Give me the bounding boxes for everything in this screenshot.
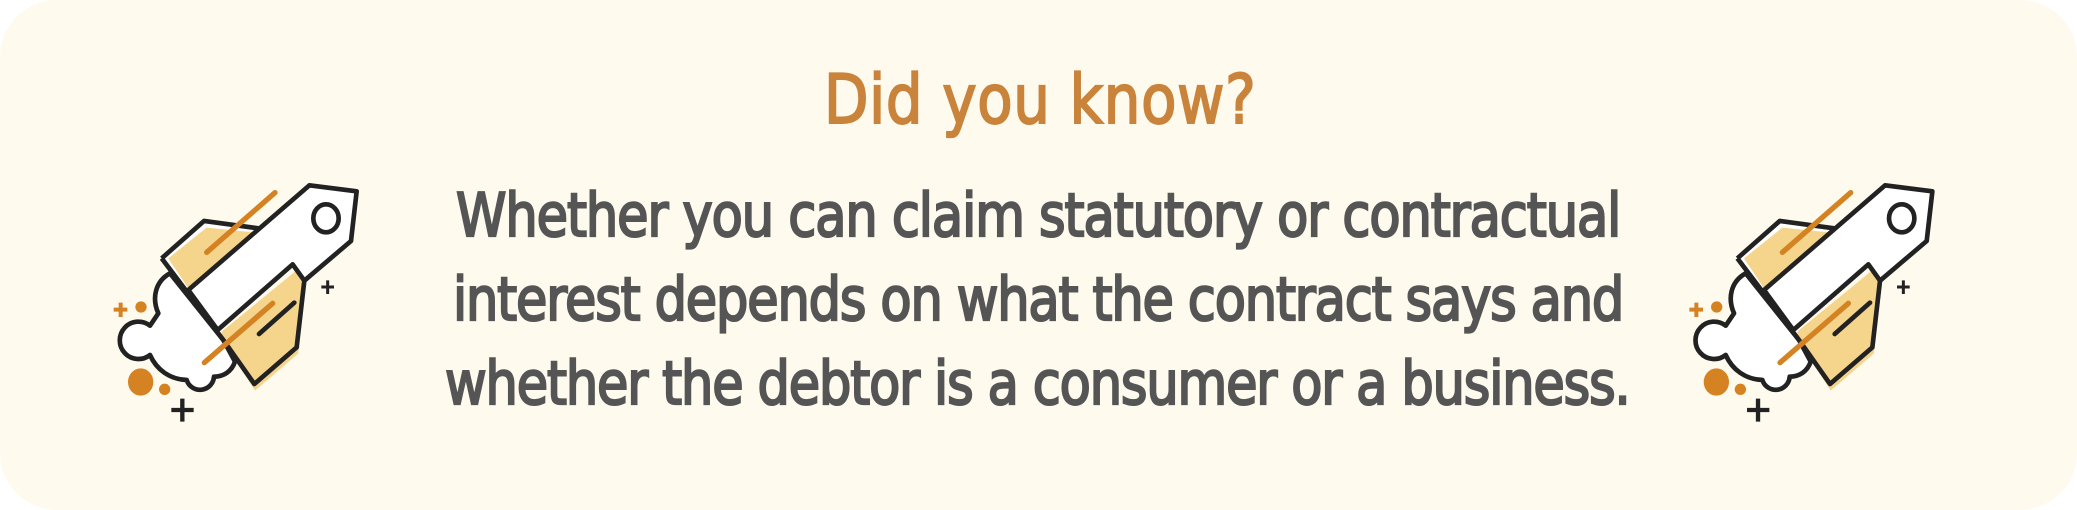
- icon: right rocket: [1689, 185, 1932, 422]
- body text: Whether you can claim statutory or contractual: [456, 181, 1621, 251]
- icon: left rocket: [114, 185, 357, 422]
- body text: whether the debtor is a consumer or a business.: [445, 349, 1631, 419]
- body text: [445, 181, 1631, 419]
- body text: interest depends on what the contract says and: [453, 265, 1624, 335]
- title: Did you know?: [824, 61, 1256, 140]
